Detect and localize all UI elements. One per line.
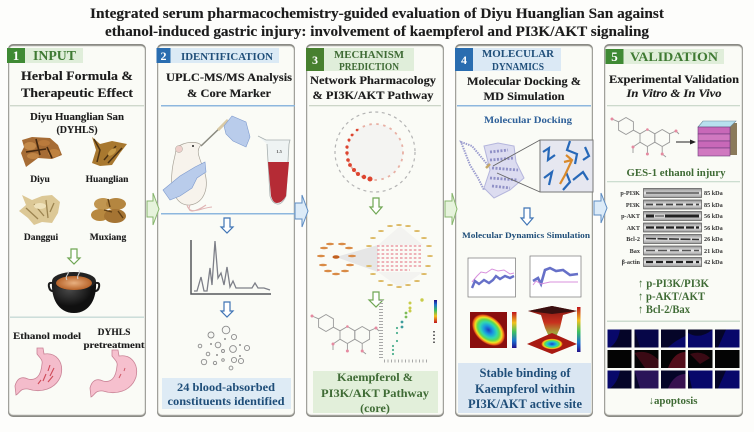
chart: 3D free energy landscape: [527, 306, 580, 354]
callout: 24 constituents: constituents identified: [168, 396, 285, 408]
formula name: (DYHLS): [56, 125, 98, 136]
label: ethanol model: Ethanol model: [13, 332, 81, 342]
label: DYHLS pretreatment: pretreatment: [84, 341, 145, 351]
illustration: mouse gavage: [163, 116, 250, 211]
blot: Bax: Bax: [630, 248, 641, 255]
arrow: network to kaempferol: [369, 292, 383, 307]
blot: Bcl-2: Bcl-2: [626, 236, 640, 243]
panel subtitle: & PI3K/AKT Pathway: [312, 88, 434, 102]
title: ethanol-induced gastric injury: involvement of kaempferol and PI3K/AKT signaling: [105, 24, 650, 40]
panel: molecular dynamics: [455, 44, 593, 417]
panel: mechanism prediction: [306, 44, 444, 417]
arrow: step 1 to 2: [147, 193, 159, 225]
chart: RMSD plot right: [530, 256, 581, 297]
label: molecular docking: Molecular Docking: [484, 116, 572, 126]
blot: PI3K: [626, 200, 723, 209]
chart: circular network: [335, 112, 415, 192]
blot: PI3K: 85 kDa: [704, 202, 723, 209]
blot: Bcl-2: [626, 234, 723, 244]
label: GES-1 ethanol injury: GES-1 ethanol injury: [626, 168, 726, 179]
icon: herbal pot: [49, 270, 99, 313]
illustration: docking inset: [540, 140, 593, 192]
icon: muxiang herb: [91, 198, 126, 223]
icon: serum tube: 1.5: [276, 149, 283, 154]
icon: kaempferol structure: [310, 314, 379, 354]
callout: 24 constituents: 24 blood-absorbed: [177, 382, 276, 394]
blot: Bcl-2: 26 kDa: [704, 236, 723, 243]
label: Diyu: Diyu: [30, 175, 50, 185]
heading: step 3 mechanism prediction: [306, 48, 414, 73]
callout: kaempferol pathway: Kaempferol &: [337, 370, 413, 384]
panel: input: [7, 44, 146, 417]
panel: validation: [604, 44, 743, 417]
arrow: docking to simulation: [521, 208, 533, 225]
arrow: sampling to chromatogram: [221, 218, 233, 233]
heading: step 5 validation: 5: [611, 49, 618, 64]
panel subtitle: Therapeutic Effect: [21, 85, 134, 100]
text: upregulated ratios: [638, 278, 709, 316]
heading: step 1 input: [7, 48, 83, 63]
panel subtitle: In Vitro & In Vivo: [625, 88, 722, 100]
blot: Bax: 21 kDa: [704, 248, 723, 255]
illustration: protein structure: [461, 142, 524, 198]
heading: step 1 input: 1: [13, 48, 19, 63]
heading: step 4 molecular dynamics: 4: [461, 53, 467, 67]
callout: stable binding: Stable binding of: [480, 365, 571, 380]
heading: step 5 validation: [606, 49, 724, 64]
blot: AKT: [627, 223, 723, 232]
chart: RMSD plot left: [468, 258, 516, 297]
icon: diyu herb: [21, 137, 62, 167]
blot: beta-actin: 42 kDa: [704, 259, 723, 266]
heading: step 2 identification: 2: [160, 49, 166, 63]
panel subtitle: UPLC-MS/MS Analysis: [166, 72, 293, 84]
panel subtitle: Network Pharmacology: [310, 73, 436, 87]
arrow: herbs to decoction: [68, 249, 80, 264]
icon: serum tube: [258, 136, 290, 204]
arrow: zoom lines to inset: [493, 140, 540, 192]
panel subtitle: MD Simulation: [484, 89, 565, 103]
panel subtitle: Molecular Docking &: [467, 74, 581, 88]
icon: constituent circles: [198, 326, 250, 370]
arrow: chromatogram to constituents: [221, 302, 233, 317]
arrow: step 4 to 5: [594, 193, 607, 223]
label: DYHLS pretreatment: [84, 328, 145, 351]
blot: AKT: 56 kDa: [704, 225, 723, 232]
heading: step 3 mechanism prediction: PREDICTION: [339, 62, 400, 73]
panel subtitle: [609, 74, 740, 100]
heading: step 2 identification: [156, 48, 279, 63]
label: Huanglian: Huanglian: [86, 175, 129, 185]
chart: western blots: [620, 188, 723, 266]
heading: step 1 input: INPUT: [33, 48, 76, 63]
text: reduced apoptosis: ↓apoptosis: [648, 396, 698, 407]
icon: injured stomach: [15, 348, 62, 395]
label: DYHLS pretreatment: DYHLS: [98, 328, 130, 338]
label: molecular dynamics simulation: Molecular Dynamics Simulation: [462, 230, 590, 240]
callout: stable binding: PI3K/AKT active site: [468, 396, 582, 411]
heading: step 3 mechanism prediction: MECHANISM: [334, 50, 405, 61]
callout: stable binding: Kaempferol within: [475, 381, 576, 396]
text: upregulated ratios: ↑ p-AKT/AKT: [638, 291, 705, 303]
heading: step 4 molecular dynamics: [455, 48, 561, 73]
label: Muxiang: Muxiang: [90, 233, 126, 243]
blot: beta-actin: [622, 258, 723, 266]
arrow: step 3 to 4: [445, 193, 457, 225]
chart: compound target network: [317, 224, 433, 288]
chart: immunofluorescence grid: [608, 330, 740, 388]
blot: p-PI3K: 85 kDa: [704, 190, 723, 197]
panel subtitle: [310, 73, 436, 102]
heading: step 3 mechanism prediction: 3: [312, 53, 318, 67]
heading: step 2 identification: IDENTIFICATION: [181, 52, 273, 63]
icon: cell plates: [698, 121, 737, 156]
heading: step 5 validation: VALIDATION: [630, 49, 719, 64]
chart: KEGG dot plot: [381, 298, 437, 361]
chart: free energy heatmap: [466, 308, 516, 352]
panel subtitle: [467, 74, 581, 103]
icon: huanglian herb: [92, 137, 127, 166]
blot: p-PI3K: [620, 188, 723, 198]
callout: kaempferol pathway: [313, 370, 438, 415]
arrow: network to PPI: [370, 198, 382, 214]
title: Integrated serum pharmacochemistry-guided evaluation of Diyu Huanglian San against: [90, 6, 664, 22]
panel subtitle: [21, 68, 134, 100]
icon: protected stomach: [90, 350, 137, 397]
text: upregulated ratios: ↑ Bcl-2/Bax: [638, 304, 690, 316]
title: [90, 6, 664, 40]
panel subtitle: Experimental Validation: [609, 74, 740, 86]
callout: 24 constituents: [162, 378, 291, 409]
panel subtitle: Herbal Formula &: [21, 68, 133, 83]
formula name: Diyu Huanglian San: [30, 112, 124, 123]
blot: p-AKT: p-AKT: [621, 213, 641, 220]
blot: AKT: AKT: [627, 225, 641, 232]
icon: kaempferol structure: [610, 118, 679, 157]
heading: step 4 molecular dynamics: DYNAMICS: [492, 62, 544, 73]
blot: p-AKT: 56 kDa: [704, 213, 723, 220]
heading: step 4 molecular dynamics: MOLECULAR: [482, 49, 555, 60]
icon: danggui herb: [19, 195, 60, 225]
formula name: [30, 112, 124, 136]
blot: p-AKT: [621, 212, 723, 220]
blot: p-PI3K: p-PI3K: [620, 190, 640, 197]
text: upregulated ratios: ↑ p-PI3K/PI3K: [638, 278, 709, 290]
arrow: treatment: [676, 141, 692, 143]
chart: chromatogram: [191, 240, 271, 294]
blot: Bax: [630, 246, 723, 255]
callout: kaempferol pathway: PI3K/AKT Pathway: [321, 386, 429, 400]
panel subtitle: & Core Marker: [187, 88, 271, 100]
callout: stable binding: [458, 363, 591, 413]
blot: PI3K: PI3K: [626, 202, 640, 209]
callout: kaempferol pathway: (core): [360, 401, 390, 415]
label: Danggui: Danggui: [24, 233, 59, 243]
arrow: step 2 to 3: [295, 195, 308, 227]
blot: beta-actin: β-actin: [622, 259, 641, 266]
panel subtitle: [166, 72, 293, 100]
panel: identification: [156, 44, 295, 417]
